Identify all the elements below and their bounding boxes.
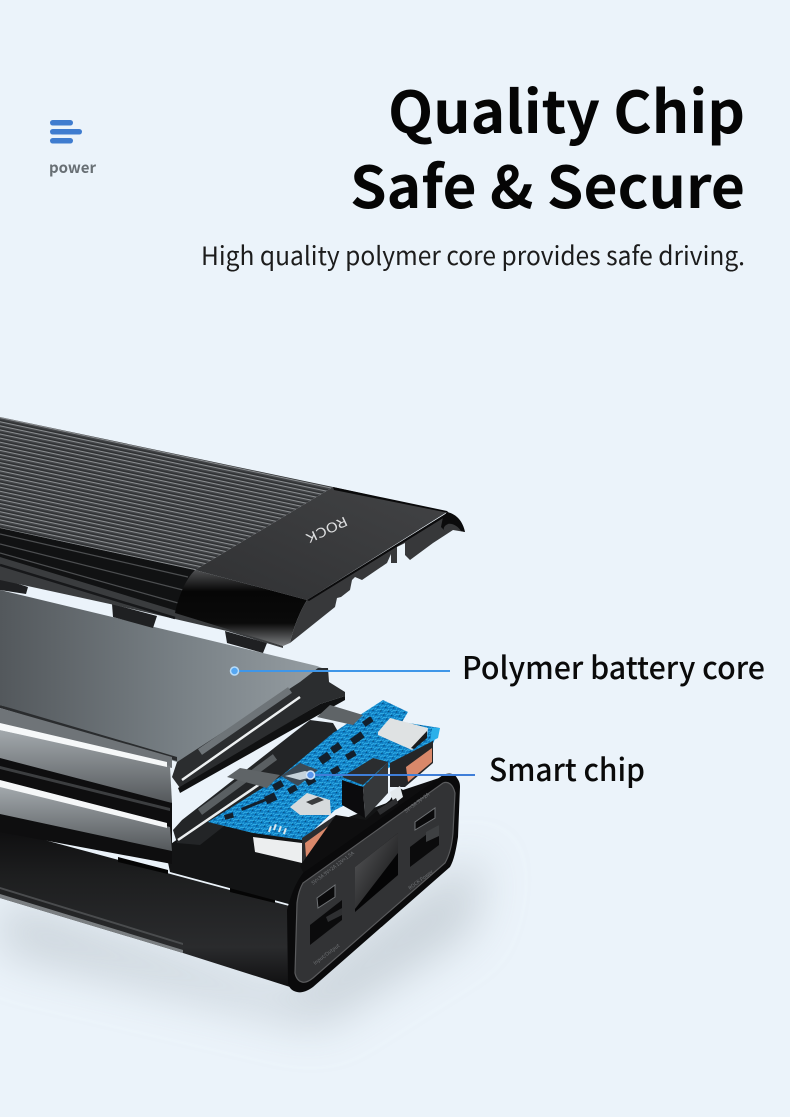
USB-C port top: [378, 718, 440, 750]
subtitle: High quality polymer core provides safe driving.: [201, 236, 745, 273]
title: [350, 66, 745, 225]
left USB-A: [310, 900, 342, 945]
inner textured edge: [290, 513, 465, 643]
port legends: [310, 791, 435, 967]
lower rim: [0, 557, 283, 648]
port legends: Input/Output: [312, 942, 341, 967]
black inner deck: [165, 776, 445, 906]
right USB-A: [410, 825, 439, 867]
port legends: ROCK Power: [407, 868, 435, 892]
display window: [355, 833, 398, 912]
flex ribbons: [227, 705, 363, 788]
gap under inductor: [300, 776, 445, 885]
drop shadow: [0, 860, 485, 1025]
curled hook: [441, 512, 465, 532]
top cover: [0, 417, 465, 653]
underside clips: [0, 578, 267, 653]
dark side ridges: [0, 528, 195, 613]
icon: menu bars: [50, 120, 82, 144]
circuit board: [208, 700, 440, 840]
callout: polymer battery core: Polymer battery core: [462, 643, 765, 688]
callout: smart chip: [306, 745, 645, 790]
ridged top: [0, 417, 333, 570]
port legends: 5V=3A 9V=2A 12V=1.5A: [310, 849, 356, 887]
bottom housing: [0, 776, 445, 987]
lower battery: [0, 720, 340, 864]
right USB-C: [415, 808, 435, 830]
USB-A port bottom: [253, 815, 336, 864]
smart chip glint: [281, 763, 318, 786]
upper battery core: [0, 590, 345, 803]
end panel: [287, 774, 460, 992]
power bank illustration: [0, 417, 485, 1025]
port legends: 5V=3A 9V=2A: [403, 791, 432, 815]
category label: power: [49, 156, 96, 178]
left USB-C: [317, 885, 335, 908]
micro USB port: [290, 793, 331, 815]
title: Quality Chip: [388, 66, 745, 150]
glossy cap front: [175, 570, 307, 646]
USB-A port top: [390, 741, 433, 787]
title: Safe & Secure: [350, 141, 745, 225]
black inductor block: [342, 758, 388, 818]
slot grooves: [0, 822, 275, 903]
brand logo: ROCK: [303, 512, 351, 549]
logo cap: [195, 487, 447, 600]
callout: polymer battery core: [230, 643, 765, 688]
callout: smart chip: Smart chip: [489, 745, 645, 790]
board components: [224, 716, 374, 820]
